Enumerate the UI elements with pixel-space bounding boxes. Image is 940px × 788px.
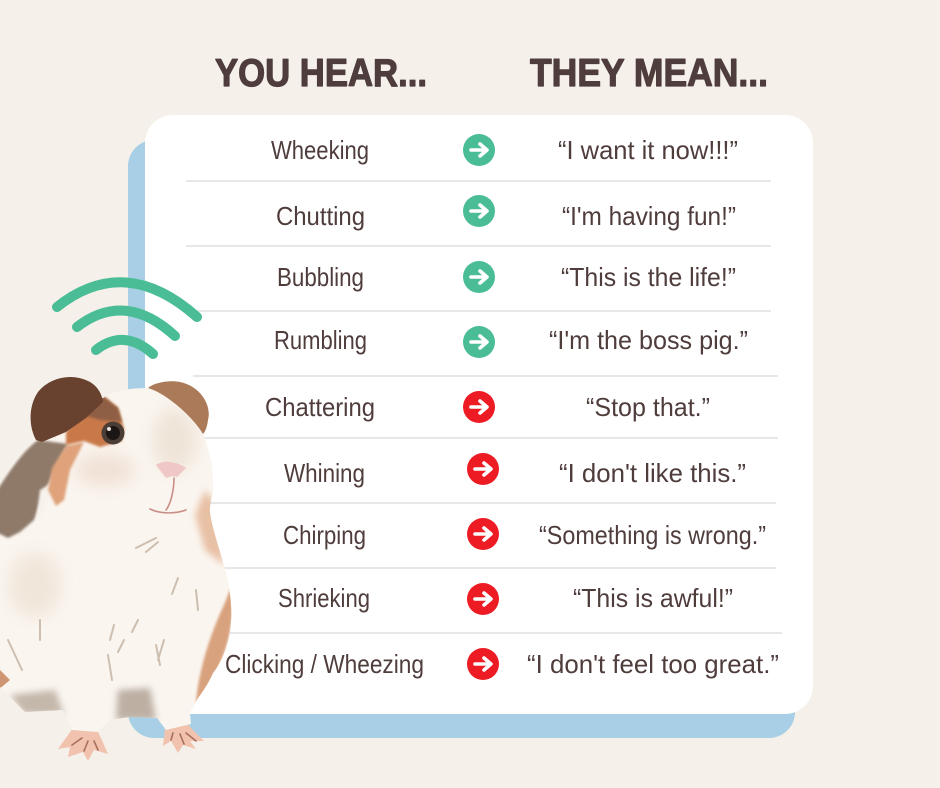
left ear	[31, 377, 103, 442]
icon: red arrow	[467, 583, 499, 615]
icon: green arrow	[463, 261, 495, 293]
icon: green arrow	[463, 326, 495, 358]
row: Chirping: “Something is wrong.”	[539, 520, 766, 550]
icon: green arrow	[463, 134, 495, 166]
row: Wheeking: Wheeking	[271, 135, 369, 165]
row: Wheeking: “I want it now!!!”	[558, 135, 738, 165]
row: Chutting	[276, 195, 736, 231]
shadow between legs	[116, 688, 156, 720]
row: Chirping	[283, 518, 766, 550]
icon: green arrow	[463, 195, 495, 227]
grey-brown back patch	[0, 440, 68, 538]
row: Rumbling: Rumbling	[274, 325, 367, 355]
cheek orange	[195, 490, 224, 565]
row: Clicking / Wheezing	[225, 648, 779, 680]
toe shadows	[72, 733, 196, 751]
row: Chattering: “Stop that.”	[586, 392, 710, 422]
panel: white table card	[145, 115, 813, 714]
icon: sound waves	[57, 282, 197, 354]
right flank orange	[196, 585, 233, 704]
row: Shrieking: “This is awful!”	[573, 583, 733, 613]
right ear	[148, 381, 209, 434]
row: Chutting: Chutting	[276, 201, 365, 231]
icon: red arrow	[467, 518, 499, 550]
white stripe in back patch	[35, 484, 48, 518]
row: Whining: “I don't like this.”	[559, 458, 746, 488]
mouth	[150, 478, 186, 513]
row: Bubbling: Bubbling	[277, 262, 364, 292]
row: Whining: Whining	[284, 458, 365, 488]
illustration: guinea pig	[0, 377, 233, 761]
row: Chattering: Chattering	[265, 392, 375, 422]
fur strokes	[8, 538, 198, 680]
panel: blue backing card	[128, 140, 795, 738]
left hip spot	[0, 670, 10, 688]
row: Bubbling	[277, 261, 736, 293]
row: Shrieking: Shrieking	[278, 583, 370, 613]
feet	[58, 722, 204, 761]
row: Bubbling: “This is the life!”	[561, 262, 736, 292]
icon: red arrow	[467, 648, 499, 680]
icon: red arrow	[463, 391, 495, 423]
row: Clicking / Wheezing: Clicking / Wheezing	[225, 649, 424, 679]
row: Chirping: Chirping	[283, 520, 366, 550]
eye	[102, 422, 124, 444]
orange patch around eye	[66, 396, 124, 447]
row: Whining	[284, 453, 746, 488]
body fill	[0, 388, 231, 732]
row: Chutting: “I'm having fun!”	[562, 201, 736, 231]
row: Rumbling: “I'm the boss pig.”	[549, 325, 748, 355]
row: Clicking / Wheezing: “I don't feel too great.”	[527, 649, 779, 679]
heading: you hear: YOU HEAR...	[215, 52, 427, 95]
soft fur shading	[9, 553, 61, 617]
shadow left haunch	[10, 690, 64, 714]
row: Chattering	[265, 391, 710, 423]
icon: red arrow	[467, 453, 499, 485]
nose	[156, 462, 186, 478]
heading: they mean: THEY MEAN...	[530, 52, 768, 95]
row: Shrieking	[278, 583, 733, 615]
row: Wheeking	[271, 134, 738, 166]
row: Rumbling	[274, 325, 748, 358]
orange cheek patch	[48, 442, 84, 506]
